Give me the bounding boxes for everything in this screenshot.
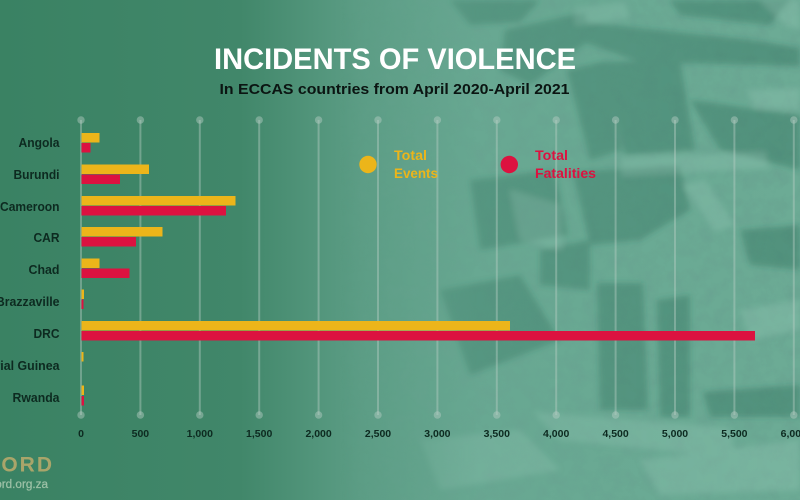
country labels: Rwanda: [12, 390, 60, 405]
country labels: [0, 135, 60, 405]
x axis labels: 500: [132, 428, 149, 440]
legend: total events: [359, 148, 438, 181]
x axis labels: 4,500: [602, 428, 629, 440]
background photo texture: pile of weapons: [434, 0, 800, 493]
x axis labels: 3,500: [484, 428, 510, 440]
legend: total fatalities: [501, 148, 596, 181]
x axis labels: [78, 428, 800, 440]
country labels: Angola: [18, 135, 60, 150]
bars: total fatalities: [82, 143, 755, 406]
title: INCIDENTS OF VIOLENCE: [214, 43, 576, 76]
legend: total fatalities: Fatalities: [535, 166, 596, 181]
x axis labels: 1,000: [187, 428, 213, 440]
x axis labels: 1,500: [246, 428, 272, 440]
country labels: DRC: [34, 326, 60, 341]
legend: total events: Total: [394, 148, 427, 163]
country labels: Burundi: [14, 167, 60, 182]
subtitle: In ECCAS countries from April 2020-April 2021: [220, 81, 570, 98]
x axis labels: 0: [78, 428, 84, 440]
x axis labels: 3,000: [424, 428, 451, 440]
x axis labels: 5,000: [662, 428, 688, 440]
grid lines: [77, 116, 798, 419]
country labels: Cameroon: [0, 199, 60, 214]
x axis labels: 4,000: [543, 428, 569, 440]
country labels: CAR: [34, 230, 60, 245]
bars: total events: [82, 133, 510, 395]
x axis labels: 2,000: [305, 428, 332, 440]
legend: total fatalities: Total: [535, 148, 568, 163]
country labels: Chad: [28, 262, 60, 277]
x axis labels: 5,500: [721, 428, 748, 440]
legend: total events: Events: [394, 166, 438, 181]
bar chart: [82, 133, 755, 406]
x axis labels: 2,500: [365, 428, 391, 440]
